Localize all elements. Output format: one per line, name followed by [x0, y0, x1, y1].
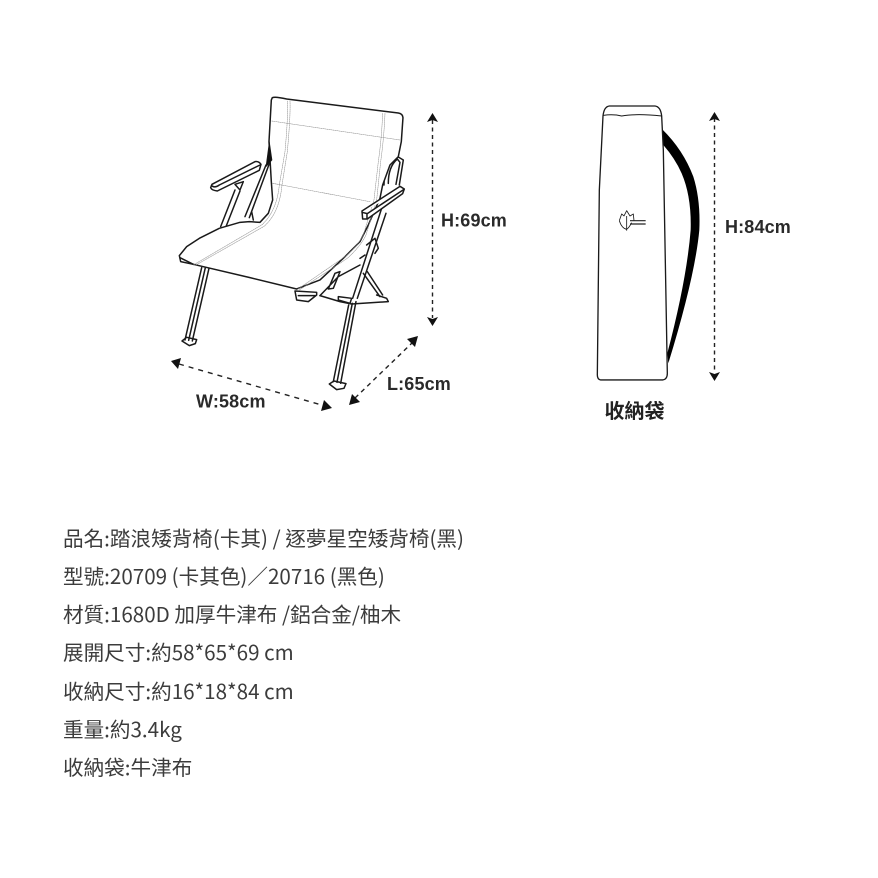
- bag opening: [603, 115, 662, 116]
- spec: model: 型號:20709 (卡其色)／20716 (黑色): [63, 560, 385, 590]
- carry bag illustration: [597, 106, 700, 380]
- label: bag height: H:84cm: [725, 217, 791, 237]
- dimension arrow: bag height: [709, 112, 720, 381]
- spec: product name: 品名:踏浪矮背椅(卡其) / 逐夢星空矮背椅(黑): [63, 522, 464, 552]
- spec: material: 材質:1680D 加厚牛津布 /鋁合金/柚木: [63, 598, 401, 628]
- strap loop: [384, 156, 403, 185]
- label: chair width: W:58cm: [196, 392, 266, 412]
- dimension arrow: chair width: [171, 358, 332, 411]
- back side fold: [266, 142, 272, 167]
- left armrest: [211, 162, 261, 191]
- label: chair length: L:65cm: [387, 374, 451, 394]
- dimension arrow: chair length: [349, 336, 418, 405]
- bag body: [597, 106, 667, 380]
- dimension arrow: chair height: [427, 113, 438, 326]
- bag caption: 收納袋: [604, 395, 664, 424]
- seat and back fabric: [179, 97, 403, 289]
- spec: packed size: 收納尺寸:約16*18*84 cm: [63, 675, 294, 705]
- right armrest: [362, 186, 404, 219]
- logo mark: [619, 211, 646, 231]
- spec: weight: 重量:約3.4kg: [63, 713, 182, 743]
- spec: open size: 展開尺寸:約58*65*69 cm: [63, 636, 294, 666]
- label: chair height: H:69cm: [441, 210, 507, 230]
- stitching lines: [193, 101, 400, 290]
- spec: bag material: 收納袋:牛津布: [63, 751, 192, 781]
- far legs and frame: [182, 160, 388, 390]
- shoulder strap: [662, 129, 700, 363]
- spec list: [63, 522, 464, 781]
- chair illustration: [179, 97, 404, 390]
